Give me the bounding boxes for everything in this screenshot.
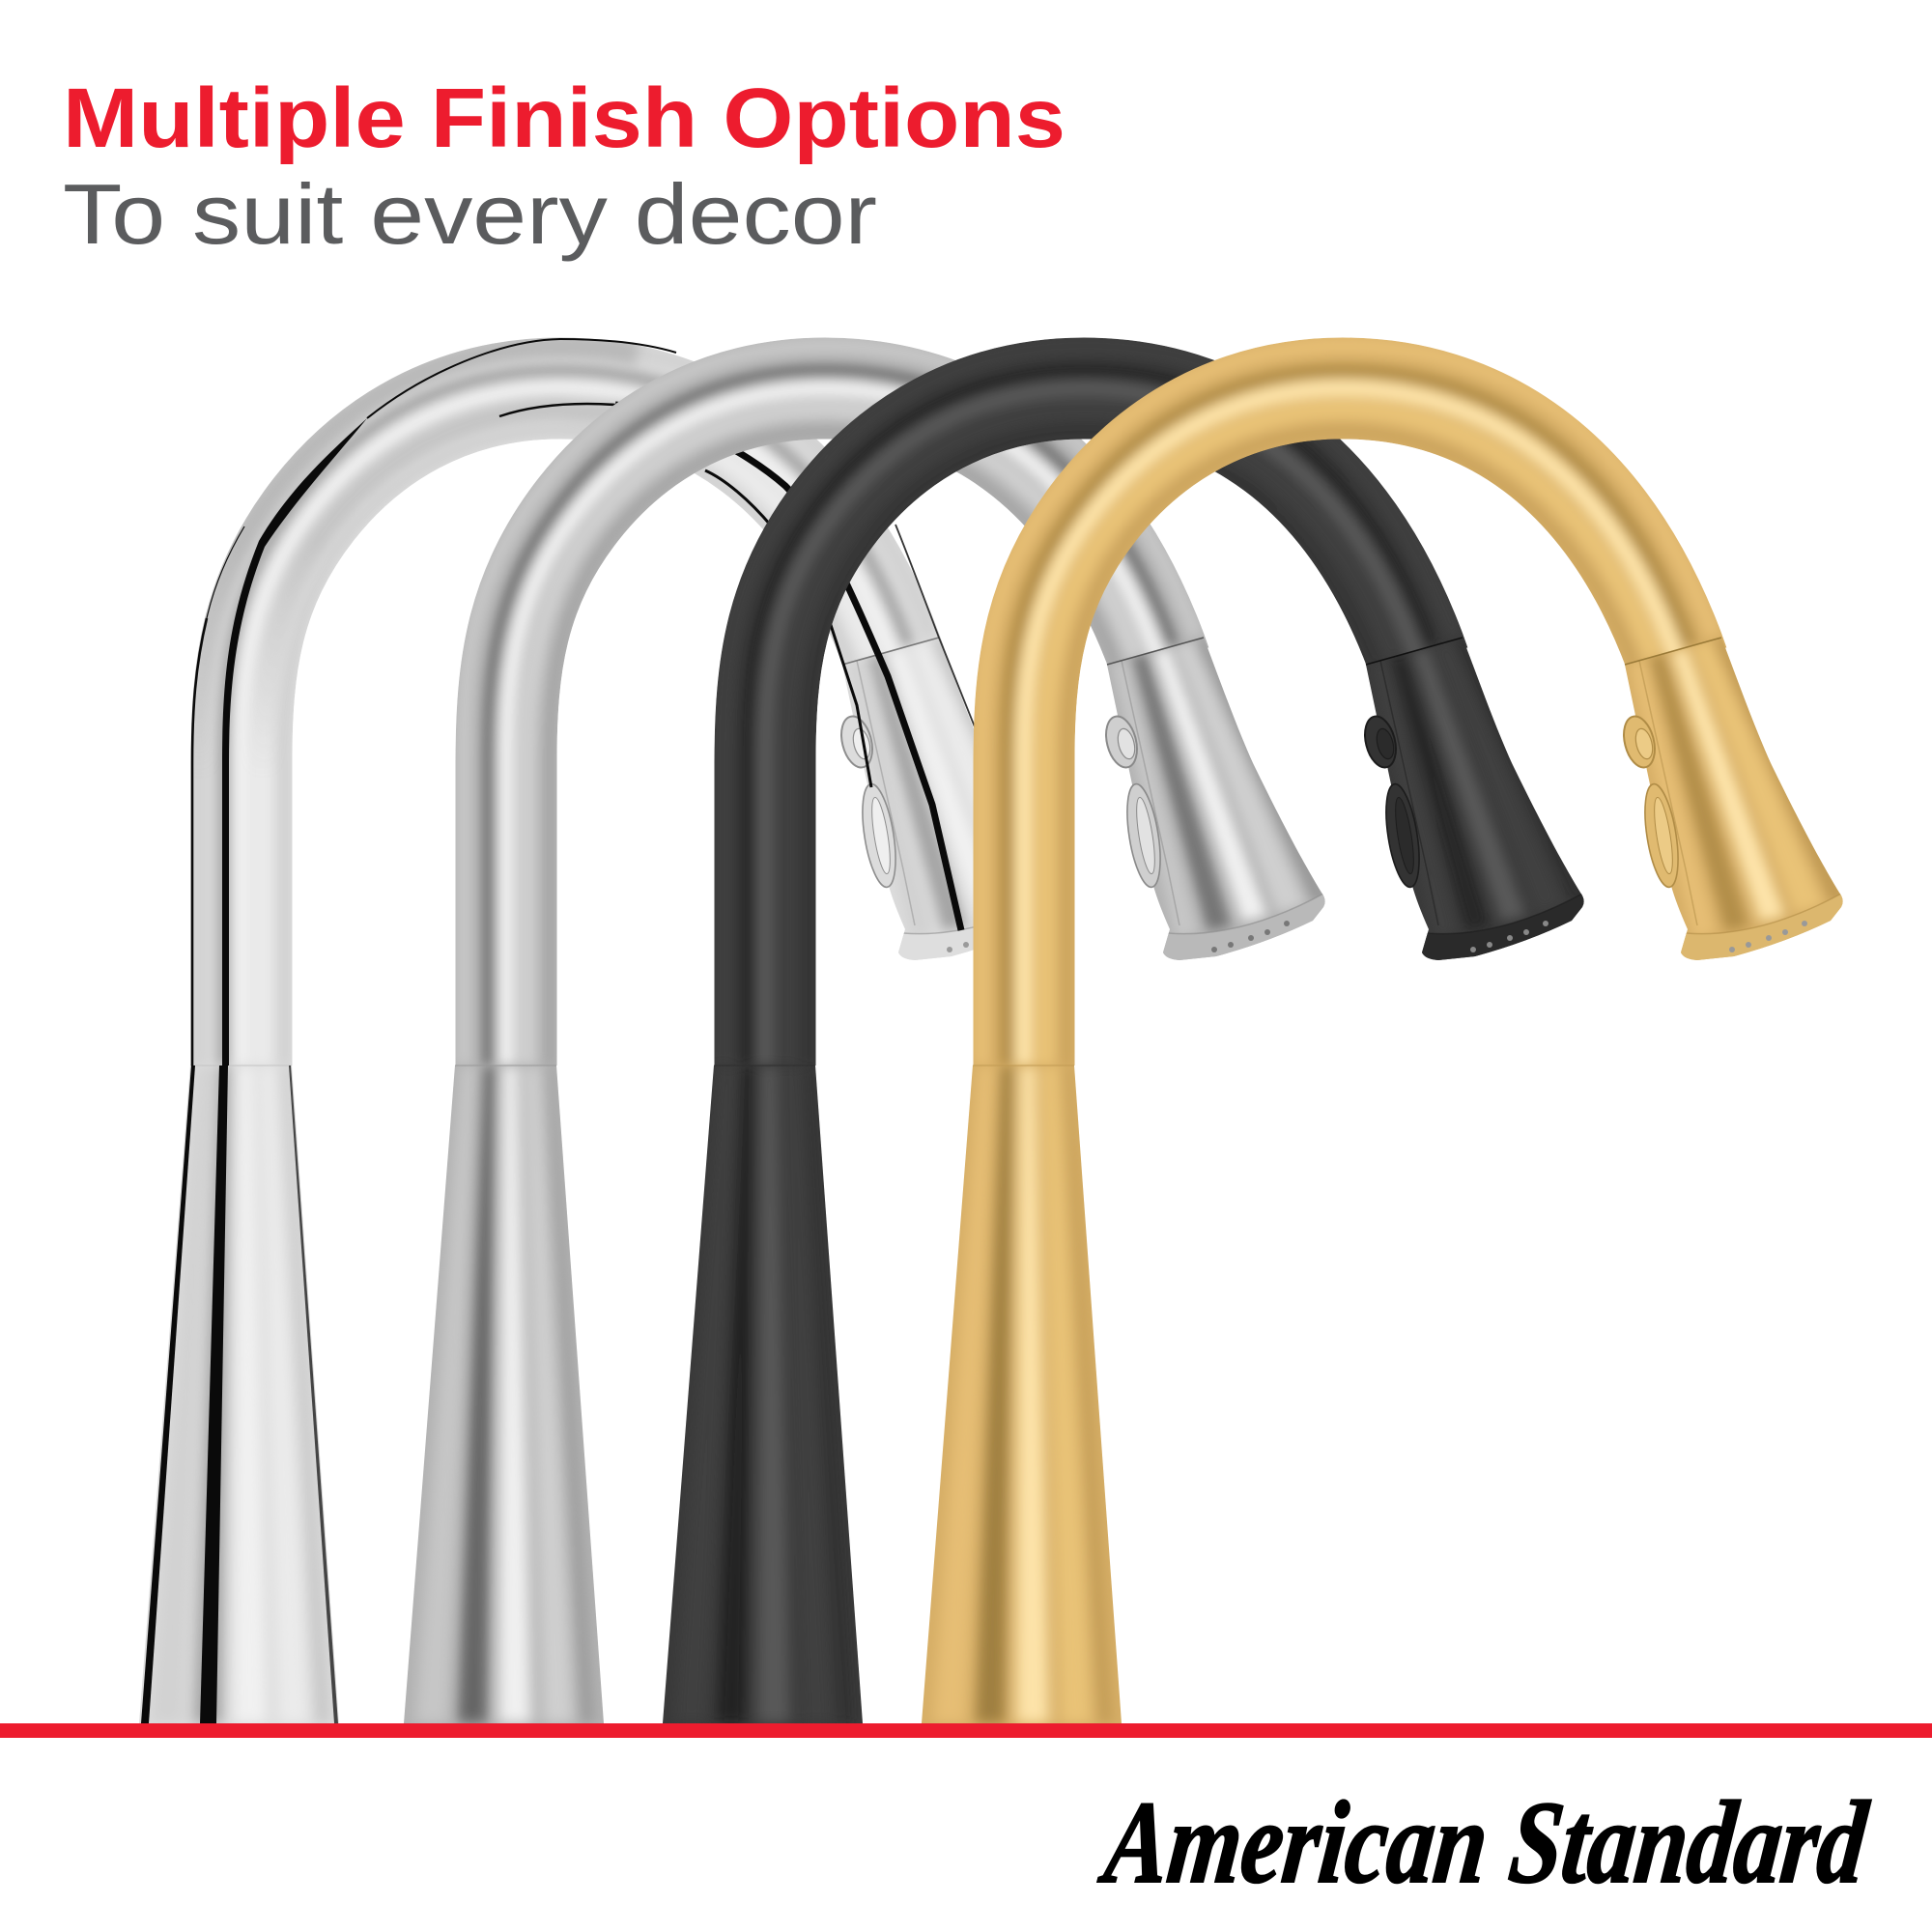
title: Multiple Finish Options — [63, 71, 1065, 165]
subtitle: To suit every decor — [63, 166, 877, 262]
red baseline bar — [0, 1723, 1932, 1738]
faucet: chrome finish — [139, 339, 1065, 1723]
faucet: brushed gold finish — [922, 346, 1847, 1723]
faucet: brushed nickel finish — [404, 346, 1329, 1723]
faucet: matte black finish — [663, 346, 1588, 1723]
